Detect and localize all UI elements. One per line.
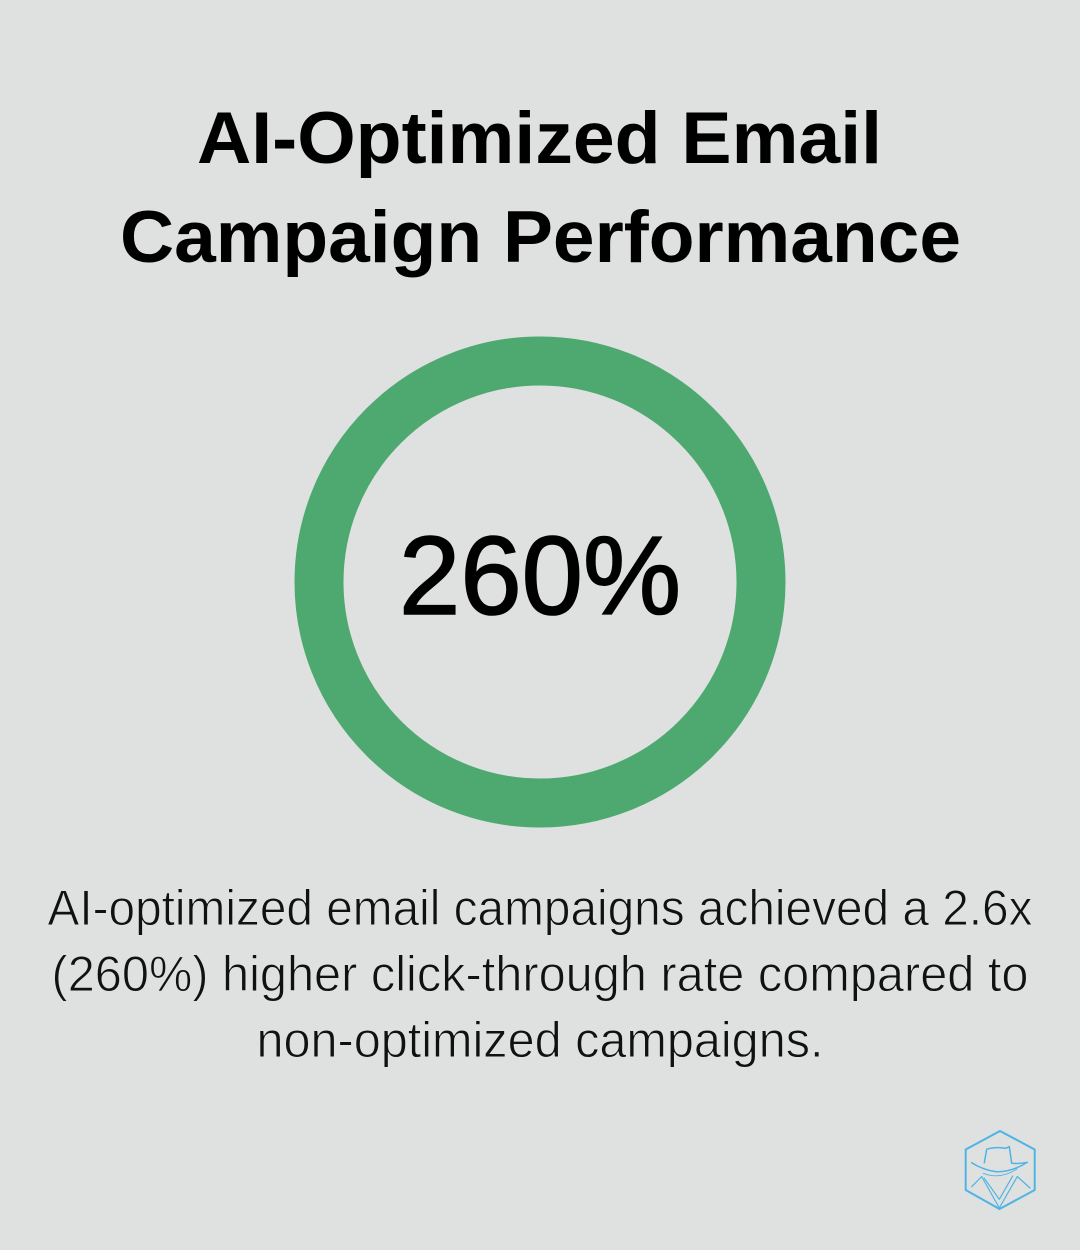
icon: hexagon logo with hat and coat (966, 1131, 1035, 1209)
description text (48, 880, 1032, 1068)
title (120, 98, 961, 278)
description text: AI-optimized email campaigns achieved a 2.6x (48, 880, 1032, 936)
description text: non-optimized campaigns. (256, 1012, 824, 1068)
value label: 260% (399, 514, 681, 638)
title: AI-Optimized Email (197, 98, 882, 179)
title: Campaign Performance (120, 197, 961, 278)
description text: (260%) higher click-through rate compared to (52, 946, 1028, 1002)
donut chart: 260% (319, 361, 761, 803)
